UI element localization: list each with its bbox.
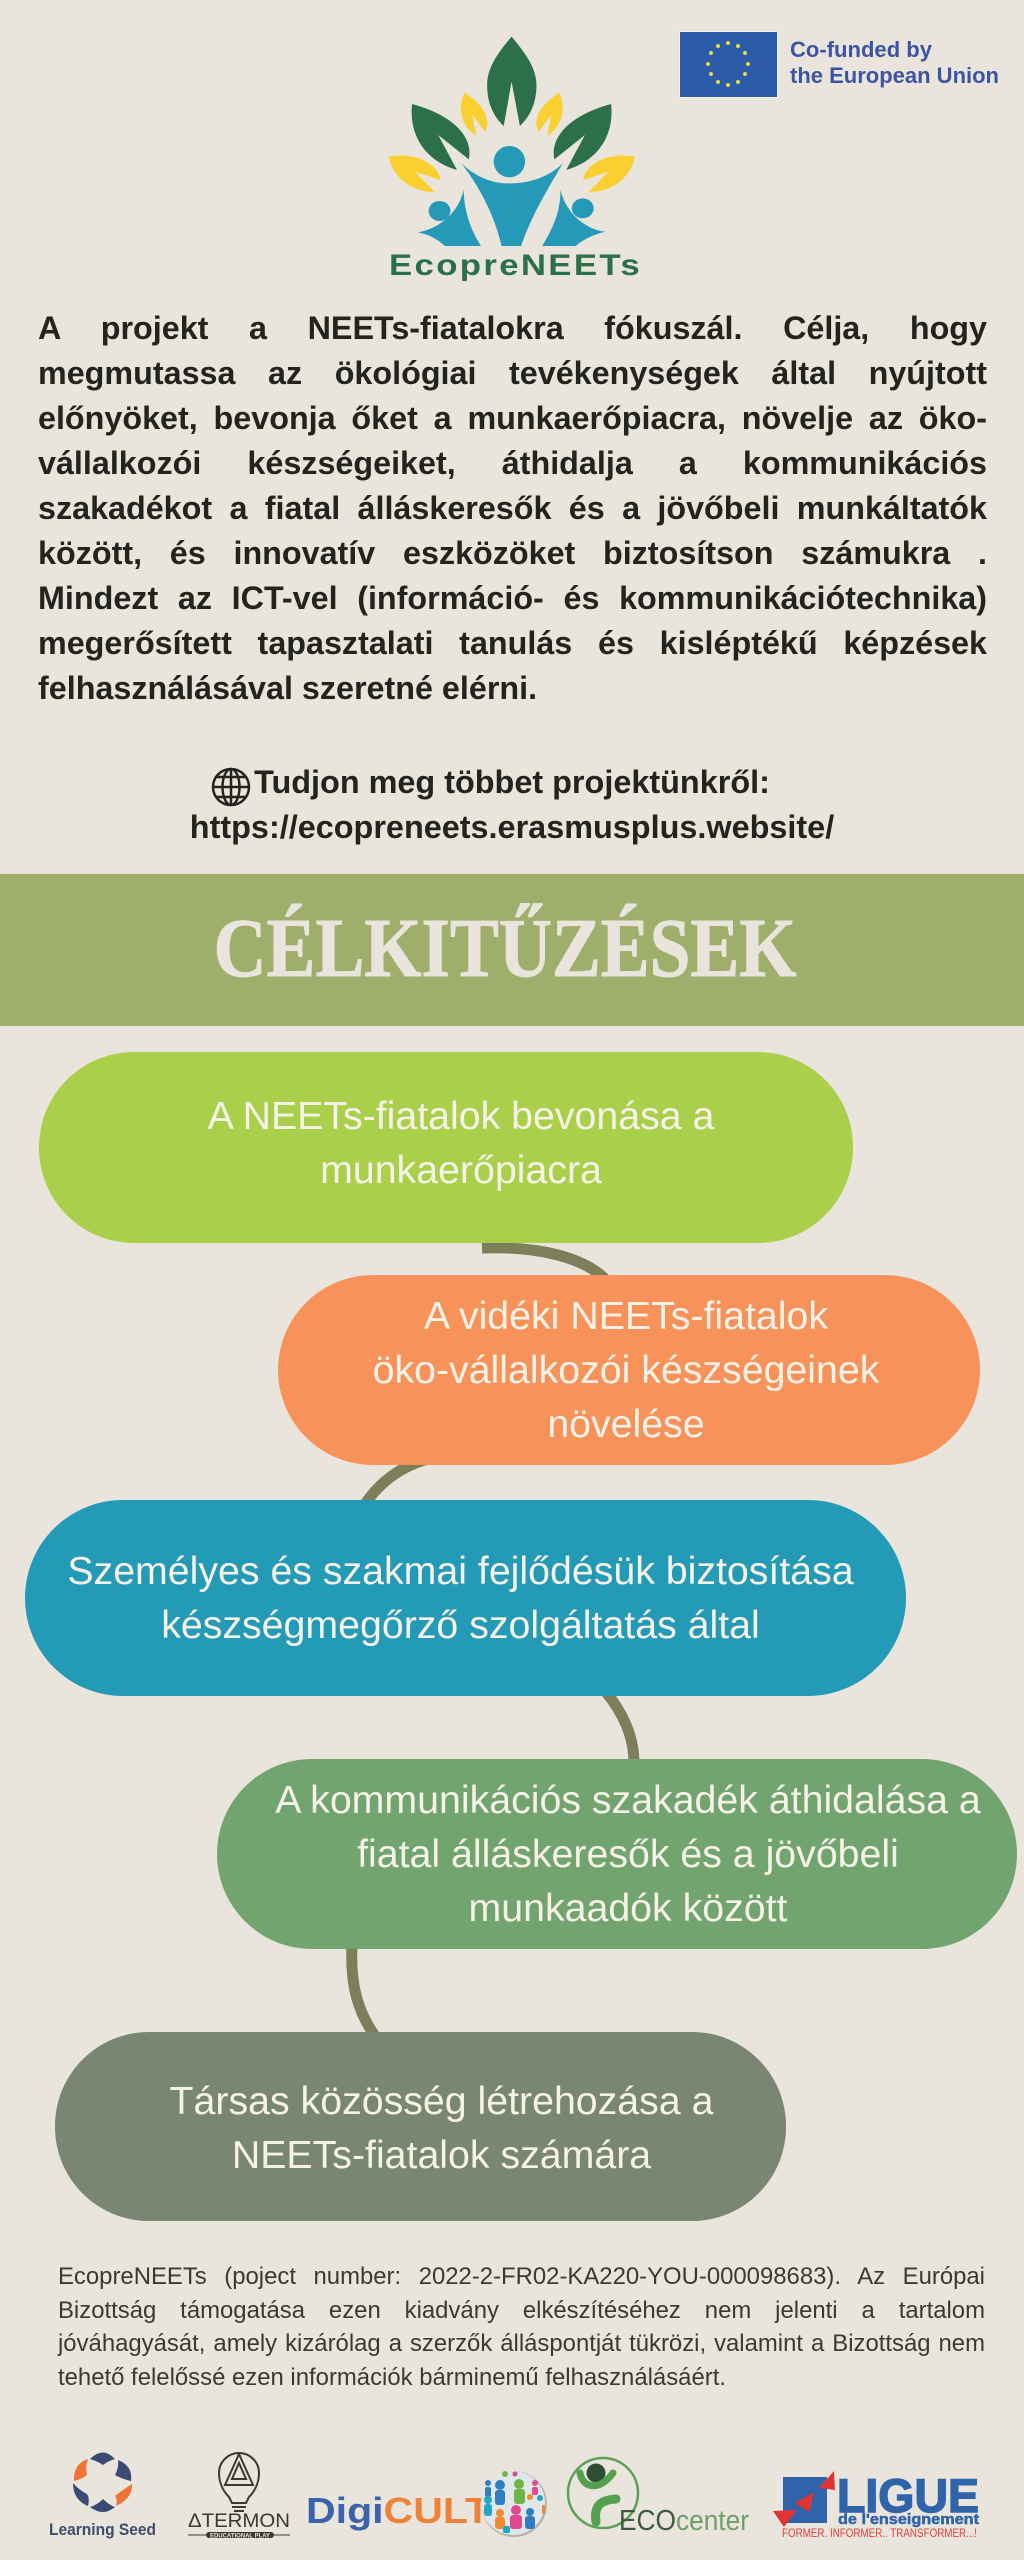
logo: EU flag and co-funded text <box>679 31 999 98</box>
co-funded text: the European Union <box>790 63 999 88</box>
logo: Learning Seed: Learning Seed <box>49 2521 156 2539</box>
objective 3 <box>25 1500 906 1696</box>
banner: célkitűzések <box>0 874 1024 1026</box>
connector: pill 3 to 4 <box>606 1692 634 1763</box>
connector: pill 1 to 2 <box>482 1248 606 1280</box>
logo: DigiCULT: Digi CULT <box>306 2490 490 2531</box>
icon: EU flag <box>679 31 778 98</box>
connector: pill 4 to 5 <box>352 1945 375 2036</box>
objective 2: A vidéki NEETs-fiatalok <box>424 1294 828 1338</box>
disclaimer text: EcopreNEETs (poject number: 2022-2-FR02-KA220-YOU-000098683). Az Európai <box>58 2263 985 2290</box>
intro text block: Mindezt az ICT-vel (információ- és kommunikációtechnika) <box>38 580 987 616</box>
logo: Ligue de l'enseignement: de l'enseignement <box>838 2511 979 2528</box>
logo: DigiCULT <box>306 2471 547 2537</box>
disclaimer text: Bizottság támogatása ezen kiadvány elkészítéséhez nem jelenti a tartalom <box>58 2296 985 2324</box>
link heading: Tudjon meg többet projektünkről: <box>254 764 770 800</box>
objective 1 <box>39 1052 853 1243</box>
objective 1: A NEETs-fiatalok bevonása a <box>208 1094 714 1138</box>
logo: Ligue de l'enseignement: LIGUE <box>837 2469 979 2522</box>
objective 4: A kommunikációs szakadék áthidalása a <box>275 1778 981 1822</box>
objective 5: Társas közösség létrehozása a <box>170 2078 713 2122</box>
co-funded text: Co-funded by <box>790 37 933 62</box>
logo: Ligue de l'enseignement: FORMER. INFORMER.. TRANSFORMER...! <box>782 2526 977 2540</box>
disclaimer text: tehető felelőssé ezen információk bárminemű felhasználásáért. <box>58 2364 726 2390</box>
logo: ECOcenter <box>568 2458 749 2537</box>
banner heading: CÉLKITŰZÉSEK <box>214 902 796 995</box>
logo: Ligue de l'enseignement <box>773 2469 979 2540</box>
objective 4 <box>217 1759 1017 1949</box>
objective 2: öko-vállalkozói készségeinek <box>373 1348 879 1392</box>
logo: ECOcenter: ECOcenter <box>619 2505 749 2537</box>
intro text block <box>38 310 987 706</box>
objective 3: Személyes és szakmai fejlődésük biztosítása <box>67 1549 854 1593</box>
intro text block: szakadékot a fiatal álláskeresők és a jövőbeli munkáltatók <box>38 490 987 526</box>
objective 5 <box>55 2032 786 2221</box>
objective 4: fiatal álláskeresők és a jövőbeli <box>357 1832 899 1876</box>
partner logos <box>49 2452 979 2540</box>
icon: globe <box>213 769 249 805</box>
intro text block: A projekt a NEETs-fiatalokra fókuszál. Célja, hogy <box>38 310 987 346</box>
intro text block: megmutassa az ökológiai tevékenységek által nyújtott <box>38 355 987 391</box>
disclaimer text <box>57 2263 985 2390</box>
objective 5: NEETs-fiatalok számára <box>232 2132 651 2176</box>
logo wordmark: EcopreNEETs <box>389 249 642 282</box>
objective 2 <box>278 1275 980 1465</box>
icon: leaves and people <box>389 37 635 246</box>
intro text block: megerősített tapasztalati tanulás és kisléptékű képzések <box>38 625 987 661</box>
objective 4: munkaadók között <box>469 1886 787 1930</box>
objective 3: készségmegőrző szolgáltatás által <box>161 1603 760 1647</box>
disclaimer text: jóváhagyását, amely kizárólag a szerzők álláspontját tükrözi, valamint a Bizottság nem <box>58 2330 985 2357</box>
project URL: https://ecopreneets.erasmusplus.website/ <box>190 809 834 845</box>
intro text block: felhasználásával szeretné elérni. <box>38 670 537 706</box>
logo: Atermon: EDUCATIONAL PLAY <box>210 2534 270 2540</box>
intro text block: vállalkozói készségeiket, áthidalja a kommunikációs <box>38 445 987 481</box>
logo: Atermon: ΔTERMON <box>188 2510 290 2532</box>
logo: Atermon <box>188 2453 290 2540</box>
logo: EcopreNEETs <box>389 37 642 282</box>
intro text block: között, és innovatív eszközöket biztosítson számukra . <box>38 535 987 571</box>
objective 1: munkaerőpiacra <box>320 1148 602 1192</box>
intro text block: előnyöket, bevonja őket a munkaerőpiacra, növelje az öko- <box>38 400 987 436</box>
logo: Learning Seed <box>49 2452 156 2539</box>
objective 2: növelése <box>547 1402 705 1446</box>
connector: pill 2 to 3 <box>365 1458 432 1504</box>
